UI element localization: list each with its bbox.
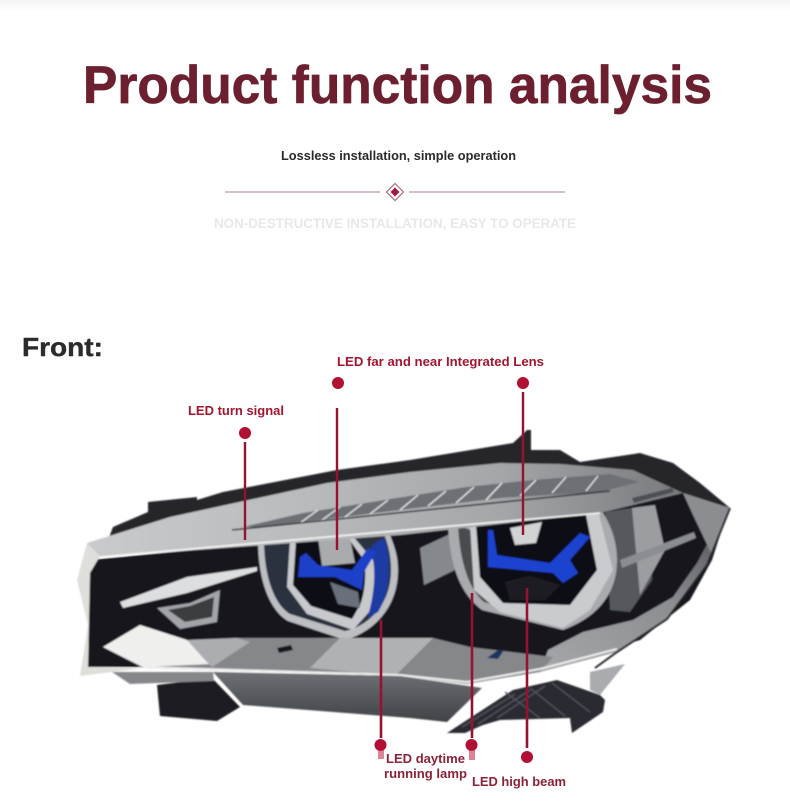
right inner trim <box>605 505 696 612</box>
divider with diamond ornament <box>225 184 565 200</box>
heading: Front: Front: <box>22 332 103 362</box>
lower reflector <box>103 625 553 684</box>
lens: left projector <box>258 530 398 640</box>
sweep band, lower right <box>540 528 722 672</box>
callout: LED daytime running lamp: LED daytime <box>386 751 465 766</box>
clear lens edge, right <box>683 493 730 555</box>
main dark interior <box>88 493 728 682</box>
title: Product function analysis <box>83 56 712 115</box>
upper DRL slats <box>88 474 640 558</box>
top rear edge <box>108 430 730 540</box>
callout: LED high beam <box>472 588 566 789</box>
bracket: right mount <box>447 664 625 733</box>
callout: LED daytime running lamp: running lamp <box>384 766 467 781</box>
clear lens edge, left <box>77 543 143 676</box>
bracket: left mount <box>157 678 240 721</box>
callout: LED far and near Integrated Lens <box>332 354 544 550</box>
callout: LED turn signal: LED turn signal <box>188 403 284 418</box>
callout: LED turn signal <box>188 403 284 540</box>
lower housing <box>213 672 482 722</box>
chrome accent and fog lens <box>120 567 257 629</box>
bright lower trim line <box>143 649 617 682</box>
callout: LED far and near Integrated Lens: LED far and near Integrated Lens <box>337 354 544 369</box>
lens: right projector <box>448 505 617 630</box>
gap detail between lenses <box>395 530 456 612</box>
callout: LED daytime running lamp <box>374 593 478 781</box>
branding plate on band <box>632 488 674 503</box>
callout: LED high beam: LED high beam <box>472 774 566 789</box>
headlight illustration <box>77 430 730 733</box>
faint English subtitle: NON-DESTRUCTIVE INSTALLATION, EASY TO OPERATE <box>214 216 576 231</box>
subtitle: Lossless installation, simple operation <box>281 149 516 163</box>
upper lens band <box>87 463 683 558</box>
